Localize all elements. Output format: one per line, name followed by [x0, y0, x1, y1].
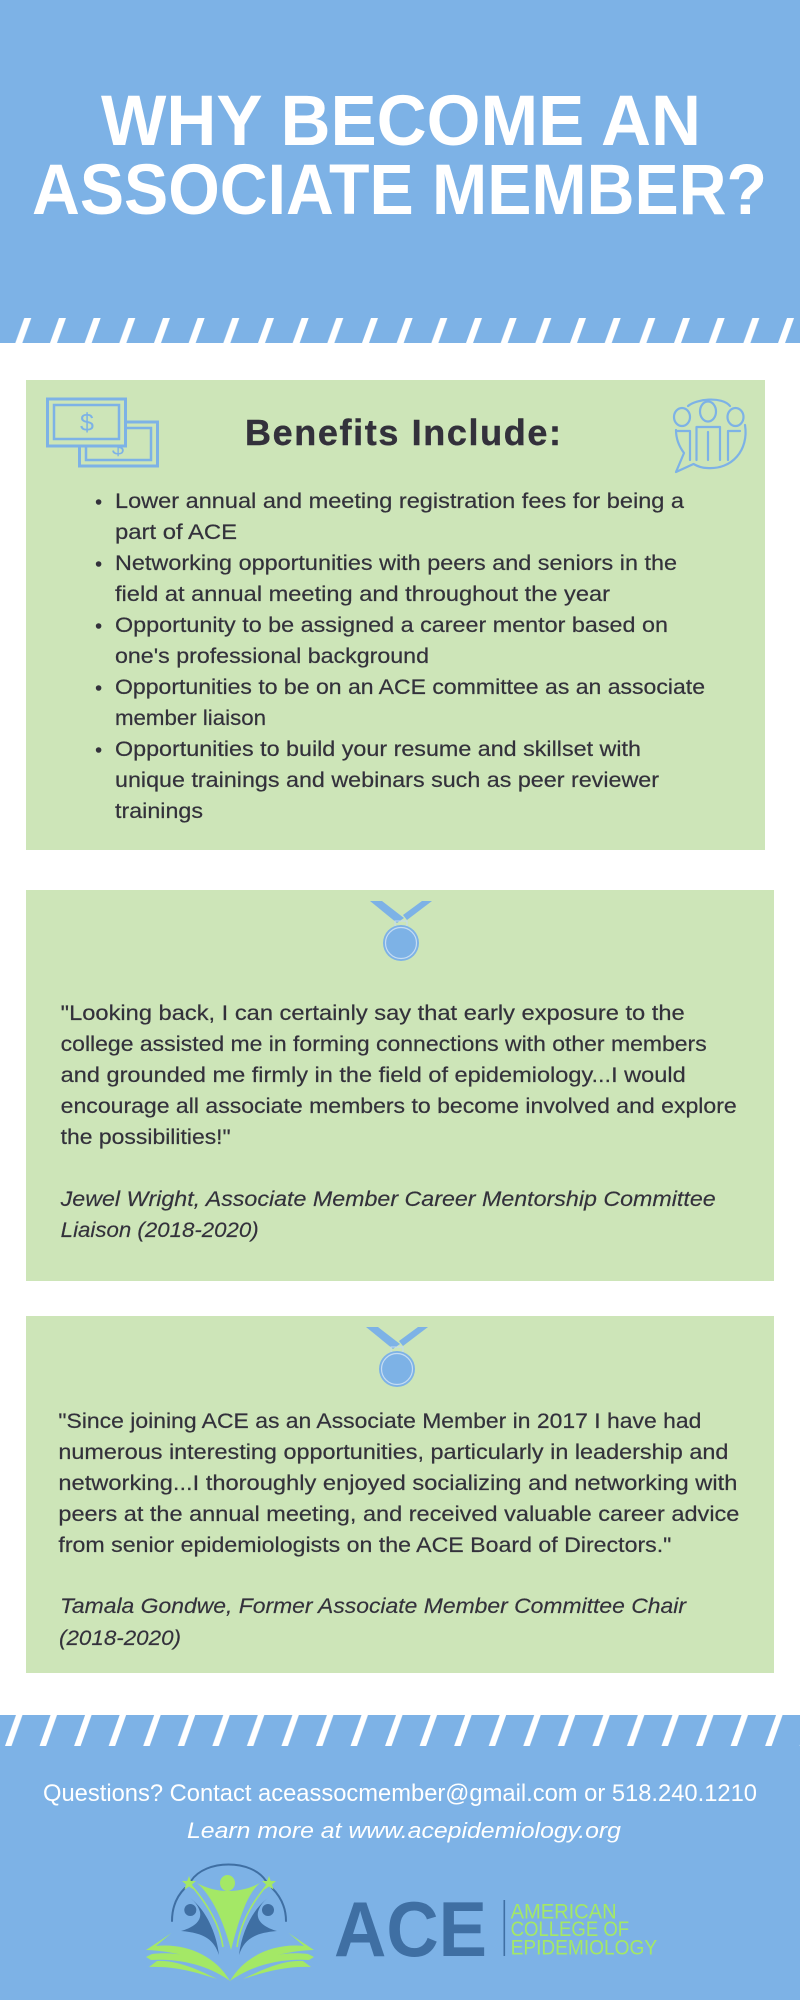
bullet list: Opportunity to be assigned a career mentor based on: [115, 614, 668, 637]
testimonial text: [58, 1410, 739, 1650]
icon: medal: [366, 1327, 428, 1387]
testimonial text: Tamala Gondwe, Former Associate Member Committee Chair: [60, 1595, 687, 1618]
testimonial text: networking...I thoroughly enjoyed socializing and networking with: [58, 1472, 737, 1495]
contact text: Questions? Contact aceassocmember@gmail.com or 518.240.1210: [43, 1780, 757, 1807]
bullet list: member liaison: [115, 707, 266, 730]
testimonial text: numerous interesting opportunities, particularly in leadership and: [58, 1441, 728, 1464]
testimonial text: and grounded me firmly in the field of epidemiology...I would: [61, 1064, 686, 1087]
header banner: [0, 0, 800, 343]
bullet list: Networking opportunities with peers and seniors in the: [115, 552, 677, 575]
logo: ACE wordmark: ACE: [334, 1885, 487, 1973]
panel: quote Tamala Gondwe: [26, 1316, 774, 1673]
icon: medal: [370, 901, 432, 961]
logo: ACE wordmark: AMERICAN: [511, 1900, 617, 1923]
icon: money bills: [48, 399, 158, 466]
testimonial text: Liaison (2018-2020): [61, 1219, 259, 1242]
icon: people speech bubble: [674, 400, 746, 472]
testimonial text: from senior epidemiologists on the ACE Board of Directors.": [58, 1534, 671, 1557]
testimonial text: "Since joining ACE as an Associate Member in 2017 I have had: [58, 1410, 701, 1433]
bullet list: unique trainings and webinars such as peer reviewer: [115, 769, 659, 792]
logo: ACE wordmark: COLLEGE OF: [511, 1918, 629, 1941]
testimonial text: "Looking back, I can certainly say that early exposure to the: [61, 1002, 685, 1025]
bullet list: [96, 490, 705, 823]
panel: benefits: [26, 380, 765, 850]
bullet list: one's professional background: [115, 645, 429, 668]
testimonial text: peers at the annual meeting, and received valuable career advice: [58, 1503, 739, 1526]
icon: money bills: $: [112, 435, 124, 460]
testimonial text: encourage all associate members to become involved and explore: [61, 1095, 737, 1118]
title: [32, 82, 767, 230]
logo: ACE emblem: [146, 1864, 314, 1981]
contact text: Learn more at www.acepidemiology.org: [187, 1818, 622, 1843]
bullet list: part of ACE: [115, 521, 237, 544]
bullet list: trainings: [115, 800, 203, 823]
bullet list: Opportunities to build your resume and skillset with: [115, 738, 641, 761]
contact text: [43, 1780, 757, 1843]
bullet list: field at annual meeting and throughout the year: [115, 583, 610, 606]
testimonial text: [60, 1002, 737, 1242]
icon: money bills: $: [80, 409, 94, 437]
footer banner: [0, 1715, 800, 2000]
testimonial text: the possibilities!": [61, 1126, 231, 1149]
testimonial text: Jewel Wright, Associate Member Career Mentorship Committee: [60, 1188, 716, 1211]
logo: ACE wordmark: [334, 1885, 657, 1973]
title: WHY BECOME AN: [101, 82, 701, 161]
title: ASSOCIATE MEMBER?: [32, 151, 767, 230]
heading: benefits include: Benefits Include:: [245, 412, 561, 453]
bullet list: Opportunities to be on an ACE committee as an associate: [115, 676, 705, 699]
testimonial text: college assisted me in forming connections with other members: [61, 1033, 707, 1056]
bullet list: Lower annual and meeting registration fees for being a: [115, 490, 684, 513]
logo: ACE wordmark: EPIDEMIOLOGY: [511, 1936, 657, 1959]
testimonial text: (2018-2020): [59, 1627, 181, 1650]
panel: quote Jewel Wright: [26, 890, 774, 1281]
